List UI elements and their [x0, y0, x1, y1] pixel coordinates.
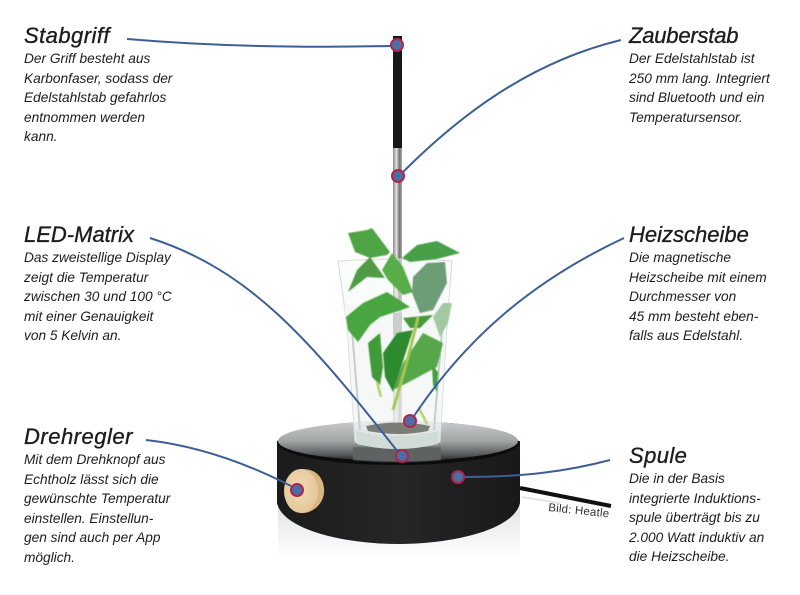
callout: Drehregler — [24, 424, 171, 565]
callout: Spule: die Heizscheibe. — [629, 549, 729, 564]
callout: Heizscheibe: Durchmesser von — [629, 289, 736, 304]
steel rod — [393, 36, 402, 430]
callout: Spule: Spule — [629, 443, 687, 468]
callout: Stabgriff: Stabgriff — [24, 23, 110, 48]
callout: Heizscheibe: Die magnetische — [629, 250, 731, 265]
callout: Spule — [628, 443, 764, 564]
callout: Drehregler: gen sind auch per App — [24, 530, 160, 545]
callout: Drehregler: möglich. — [24, 550, 75, 565]
callout: Drehregler: einstellen. Einstellun- — [24, 511, 153, 526]
callout: Zauberstab: sind Bluetooth und ein — [629, 90, 764, 105]
callout: Drehregler: gewünschte Temperatur — [24, 491, 170, 506]
callout: LED-Matrix: Das zweistellige Display — [24, 250, 171, 265]
callout: Heizscheibe: Heizscheibe mit einem — [629, 270, 767, 285]
connector line: Stabgriff — [127, 39, 391, 47]
callout: LED-Matrix: zwischen 30 und 100 °C — [24, 289, 172, 304]
callout: Zauberstab: 250 mm lang. Integriert — [629, 71, 770, 86]
connector line: Zauberstab — [403, 40, 621, 172]
mint leaves — [346, 228, 460, 424]
callout: Zauberstab — [628, 23, 770, 125]
callout: LED-Matrix: LED-Matrix — [24, 222, 134, 247]
callout: Stabgriff: Der Griff besteht aus — [24, 51, 150, 66]
callout: Stabgriff: Edelstahlstab gefahrlos — [24, 90, 166, 105]
callout: Heizscheibe: Heizscheibe — [629, 222, 749, 247]
reflection shadow under base — [278, 505, 520, 560]
photo credit: Bild: Heatle — [548, 502, 610, 520]
callout: Drehregler: Drehregler — [24, 424, 133, 449]
induction base — [277, 421, 520, 544]
callout: Zauberstab: Der Edelstahlstab ist — [629, 51, 755, 66]
callout: Heizscheibe: 45 mm besteht eben- — [629, 309, 758, 324]
callout: Stabgriff: kann. — [24, 129, 57, 144]
connector line: LED-Matrix — [150, 238, 398, 452]
callout: Heizscheibe — [629, 222, 767, 343]
callout: Zauberstab: Zauberstab — [629, 23, 738, 48]
callout: LED-Matrix: von 5 Kelvin an. — [24, 328, 121, 343]
callout: Stabgriff: Karbonfaser, sodass der — [24, 71, 172, 86]
connector line: Spule — [465, 460, 610, 477]
callout: LED-Matrix — [24, 222, 172, 343]
callout: Spule: spule überträgt bis zu — [629, 510, 760, 525]
callout: Zauberstab: Temperatursensor. — [629, 110, 743, 125]
power cable — [520, 488, 611, 506]
callout: Stabgriff — [24, 23, 173, 144]
connector line: Drehregler — [146, 440, 291, 486]
callout: Spule: 2.000 Watt induktiv an — [629, 530, 764, 545]
callout: Spule: integrierte Induktions- — [629, 491, 761, 506]
glass — [338, 259, 452, 449]
callout: Stabgriff: entnommen werden — [24, 110, 145, 125]
callout: Drehregler: Echtholz lässt sich die — [24, 472, 159, 487]
callout: LED-Matrix: mit einer Genauigkeit — [24, 309, 153, 324]
callout: LED-Matrix: zeigt die Temperatur — [24, 270, 148, 285]
marker dots — [291, 39, 464, 496]
callout: Spule: Die in der Basis — [629, 471, 725, 486]
rotary knob — [284, 469, 324, 513]
callout: Drehregler: Mit dem Drehknopf aus — [24, 452, 166, 467]
connector line: Heizscheibe — [414, 238, 624, 416]
callout: Heizscheibe: falls aus Edelstahl. — [629, 328, 743, 343]
